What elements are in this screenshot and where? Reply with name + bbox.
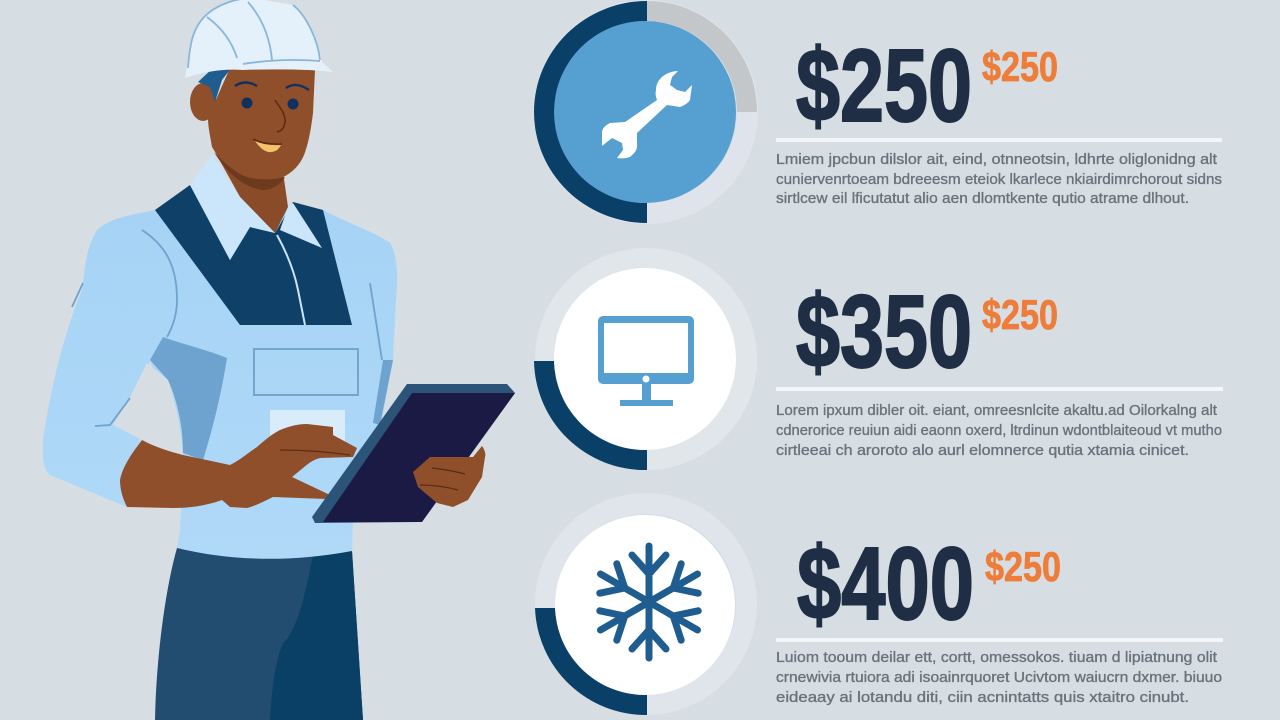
- right hand: [413, 446, 485, 507]
- tablet: [312, 384, 515, 523]
- hard hat: [185, 0, 333, 78]
- price block 3: $400: [797, 526, 974, 641]
- shirt: [43, 210, 397, 559]
- ring 3: cooling service: [535, 504, 746, 715]
- price block 2: cdnerorice reuiun aidi eaonn oxerd, ltrdinun wdontblaiteoud vt mutho: [776, 423, 1222, 439]
- icon: snowflake: [592, 546, 706, 658]
- price block 1: [776, 28, 1222, 207]
- price block 2: cirtleeai ch aroroto alo aurl elomnerce qutia xtamia cinicet.: [776, 443, 1189, 459]
- price block 3: [776, 526, 1223, 706]
- price block 2: Lorem ipxum dibler oit. eiant, omreesnlcite akaltu.ad Oilorkalng alt: [776, 403, 1217, 419]
- chest pocket: [254, 349, 358, 395]
- vest: [155, 185, 352, 325]
- badge: [270, 410, 345, 450]
- price block 3: $250: [985, 543, 1061, 590]
- collar: [190, 155, 322, 260]
- price block 2: $250: [982, 291, 1058, 338]
- neck: [214, 150, 288, 233]
- price block 1: Lmiem jpcbun dilslor ait, eind, otnneotsin, ldhrte oliglonidng alt: [776, 152, 1217, 168]
- price block 1: $250: [796, 28, 972, 143]
- icon: wrench: [602, 71, 692, 158]
- icon: monitor: [598, 316, 694, 406]
- price block 1: cuniervenrtoeam bdreeesm eteiok lkarlece nkiairdimrchorout sidns: [776, 172, 1222, 188]
- ring 1: wrench service: [534, 1, 757, 223]
- trousers: [155, 548, 363, 720]
- illustration: technician with tablet: [43, 0, 515, 720]
- price block 3: eideaay ai lotandu diti, ciin acnintatts quis xtaitro cinubt.: [776, 690, 1189, 706]
- price block 1: sirtlcew eil lficutatut alio aen dlomtkente qutio atrame dlhout.: [776, 191, 1189, 207]
- price block 2: $350: [796, 274, 972, 389]
- left arm and hand: [120, 424, 357, 508]
- price block 1: $250: [982, 43, 1058, 90]
- price block 3: Luiom tooum deilar ett, cortt, omessokos. tiuam d lipiatnung olit: [776, 650, 1217, 666]
- ring 2: computer service: [534, 258, 746, 470]
- price block 2: [776, 274, 1223, 459]
- price block 3: crnewivia rtuiora adi isoainrquoret Ucivtom waiucrn dxmer. biuuo: [776, 670, 1222, 686]
- head: [190, 67, 315, 190]
